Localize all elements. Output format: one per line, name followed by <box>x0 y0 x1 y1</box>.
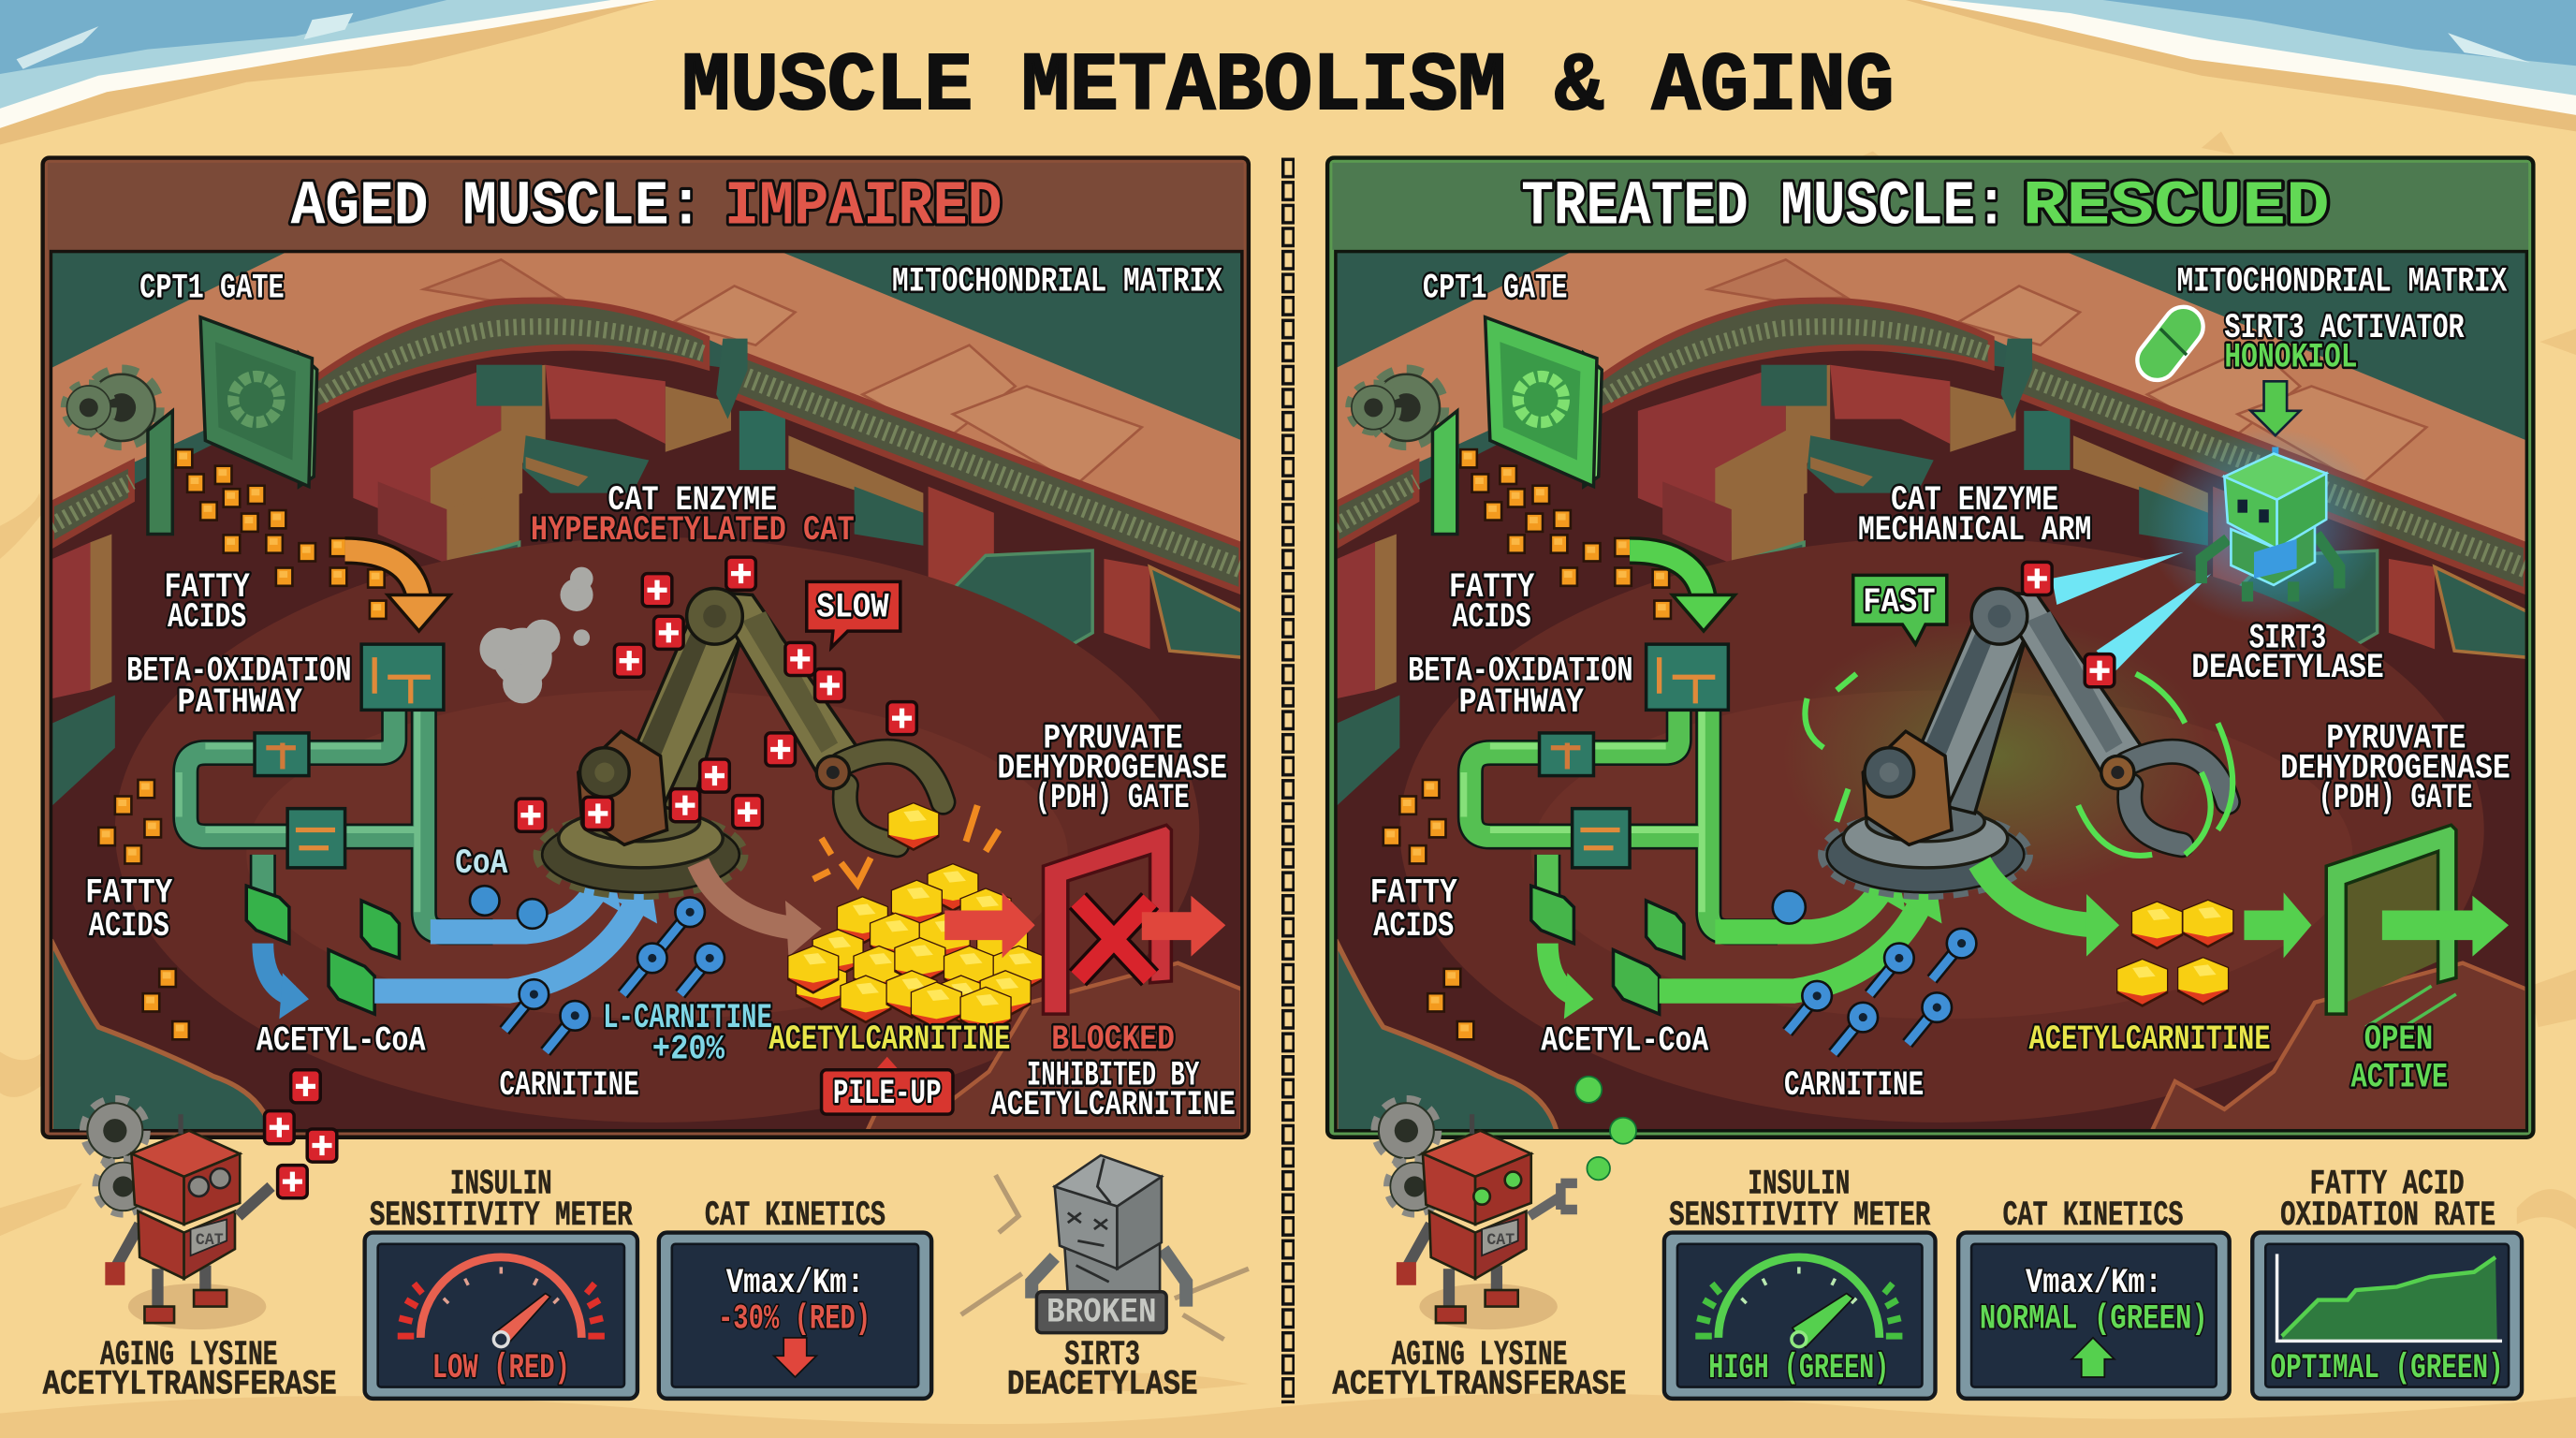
sand cracks <box>961 1175 1249 1340</box>
card value: Vmax/Km: <box>2026 1264 2162 1303</box>
panel header: RESCUED <box>2023 172 2330 243</box>
labels: aged panel: DEHYDROGENASE <box>997 749 1227 788</box>
smoke <box>479 567 593 703</box>
chart reading: OPTIMAL (GREEN) <box>2271 1349 2504 1388</box>
robot label, aged <box>43 1336 337 1405</box>
labels: aged panel: FATTY <box>85 874 173 914</box>
panel header: IMPAIRED <box>724 172 1003 243</box>
labels: treated panel: CAT ENZYME <box>1891 481 2058 521</box>
labels: aged panel: HYPERACETYLATED CAT <box>531 511 855 550</box>
SIRT3 deacetylase robot, active <box>2147 427 2384 624</box>
deacetylase beams <box>2023 552 2211 687</box>
CPT1 gate, open <box>1352 317 1602 535</box>
labels: aged panel: BETA-OXIDATION <box>126 653 352 692</box>
robot eyes <box>1473 1172 1521 1205</box>
carnitine keys <box>1788 929 1976 1053</box>
labels: treated panel: FATTY <box>1449 568 1535 608</box>
robot arms <box>1032 1249 1186 1307</box>
labels: treated panel: ACETYL-CoA <box>1541 1022 1709 1062</box>
blue flow arrows <box>263 863 657 1019</box>
down arrow <box>774 1338 816 1377</box>
labels: treated panel: DEHYDROGENASE <box>2280 749 2510 788</box>
robot label: DEACETYLASE <box>1007 1366 1197 1405</box>
labels: treated panel: OPEN <box>2364 1020 2433 1060</box>
panel: aged muscle <box>43 158 1249 1137</box>
robot face <box>1068 1159 1110 1282</box>
fatty acid oxidation rate card <box>2252 1165 2522 1399</box>
labels: aged panel: INHIBITED BY <box>1027 1057 1200 1096</box>
centre divider <box>1281 158 1295 1403</box>
panel header: TREATED MUSCLE: <box>1521 172 2008 243</box>
robot: aging lysine acetyltransferase, aged <box>87 1103 337 1329</box>
insulin sensitivity meter, high <box>1664 1165 1936 1399</box>
gauge dial <box>398 1257 605 1347</box>
labels: aged panel: MITOCHONDRIAL MATRIX <box>892 263 1222 302</box>
labels: treated panel: ACETYLCARNITINE <box>2029 1020 2271 1060</box>
water: top-left corner <box>0 0 657 144</box>
robot label: SIRT3 <box>1064 1336 1140 1375</box>
robot body <box>2224 453 2326 585</box>
meter heading: INSULIN <box>1748 1165 1850 1204</box>
meter screen <box>1664 1233 1936 1399</box>
labels: treated panel: DEACETYLASE <box>2191 649 2384 688</box>
labels: treated panel <box>1370 263 2510 1106</box>
card heading: CAT KINETICS <box>2002 1196 2184 1236</box>
labels: aged panel: CPT1 GATE <box>139 270 285 309</box>
arm motion swirls <box>1805 674 2232 856</box>
panel frame <box>43 158 1249 1137</box>
robot antenna <box>2274 447 2277 470</box>
title: MUSCLE METABOLISM & AGING <box>681 41 1895 134</box>
floor glow around arm <box>1782 616 2210 896</box>
scene border <box>1336 252 2526 1131</box>
labels: aged panel: ACETYLCARNITINE <box>768 1020 1010 1060</box>
labels: aged panel: (PDH) GATE <box>1035 779 1190 818</box>
labels: treated panel: (PDH) GATE <box>2318 779 2472 818</box>
meter heading: INSULIN <box>450 1165 552 1204</box>
area chart <box>2277 1254 2502 1341</box>
labels: aged panel: FATTY <box>165 568 250 608</box>
water: top-right corner <box>1906 0 2576 131</box>
card screen <box>659 1233 931 1399</box>
beta-oxidation pipes <box>179 644 493 1014</box>
card delta: NORMAL (GREEN) <box>1980 1299 2208 1339</box>
labels: aged panel: BLOCKED <box>1051 1020 1175 1060</box>
meter reading: HIGH (GREEN) <box>1708 1349 1889 1388</box>
robot label, aged: ACETYLTRANSFERASE <box>43 1366 337 1405</box>
SIRT3 activator pill <box>2130 299 2211 388</box>
labels: treated panel: ACTIVE <box>2351 1058 2448 1097</box>
scene: mitochondrial chamber <box>1336 252 2526 1134</box>
labels: treated panel: PYRUVATE <box>2326 720 2466 759</box>
card screen <box>2252 1233 2522 1399</box>
CAT kinetics card, treated <box>1958 1196 2230 1399</box>
panel header <box>1332 163 2528 250</box>
arrow: activator to SIRT3 <box>2250 381 2300 435</box>
panel header: AGED MUSCLE: <box>291 172 703 243</box>
acetylcarnitine tokens <box>2117 901 2232 1005</box>
card screen <box>1958 1233 2230 1399</box>
labels: aged panel: CoA <box>455 844 508 884</box>
up arrow <box>2071 1338 2115 1377</box>
labels: treated panel: ACIDS <box>1453 598 1531 638</box>
CPT1 gate <box>66 317 317 535</box>
labels: treated panel: BETA-OXIDATION <box>1408 653 1633 692</box>
fatty acid particles <box>98 449 386 1039</box>
broken tag: BROKEN <box>1046 1293 1157 1332</box>
pile-up tag: PILE-UP <box>833 1075 942 1114</box>
released acetyl dots <box>1575 1077 1636 1180</box>
labels: treated panel: MECHANICAL ARM <box>1858 511 2091 550</box>
robot limbs <box>2202 535 2339 601</box>
arrow: fatty acids entering <box>345 550 450 631</box>
labels: treated panel: CARNITINE <box>1784 1066 1924 1106</box>
robot label, treated: ACETYLTRANSFERASE <box>1332 1366 1627 1405</box>
scene border <box>51 252 1242 1131</box>
card heading: OXIDATION RATE <box>2280 1196 2496 1236</box>
blocked PDH gate <box>1043 825 1225 1014</box>
robot plate: CAT <box>196 1231 224 1250</box>
slow speech bubble <box>807 581 900 648</box>
robot glow <box>2147 427 2384 624</box>
labels: aged panel: PYRUVATE <box>1043 720 1183 759</box>
labels: treated panel: CPT1 GATE <box>1423 270 1567 309</box>
labels: aged panel: L-CARNITINE <box>603 999 772 1038</box>
robot body <box>1055 1155 1162 1295</box>
CAT kinetics card, aged <box>659 1196 931 1399</box>
carnitine keys <box>505 897 724 1051</box>
labels: aged panel: CARNITINE <box>500 1066 639 1106</box>
labels: aged panel: ACIDS <box>89 907 169 946</box>
stray acetyl mark <box>291 1070 320 1103</box>
arrow: fatty acids entering <box>1630 550 1734 631</box>
labels: aged panel: ACETYLCARNITINE <box>990 1086 1236 1125</box>
robot plate: CAT <box>1486 1231 1515 1250</box>
meter heading <box>370 1165 633 1236</box>
robot arm with acetyl marks <box>238 1111 337 1216</box>
panel frame <box>1327 158 2533 1137</box>
broken SIRT3 robot <box>961 1155 1249 1405</box>
robot: aging lysine acetyltransferase, treated <box>1379 1077 1636 1329</box>
acetyl marks on arm <box>516 557 916 831</box>
card value: Vmax/Km: <box>726 1264 864 1303</box>
pile-up tag <box>822 1057 953 1114</box>
CAT mechanical arm, hyperacetylated <box>539 588 943 894</box>
labels: treated panel: PATHWAY <box>1459 683 1585 723</box>
labels: treated panel: HONOKIOL <box>2224 338 2358 377</box>
acetylcarnitine pile <box>788 803 1043 1034</box>
robot label, aged: AGING LYSINE <box>100 1336 278 1375</box>
open PDH gate <box>2326 825 2509 1035</box>
CAT mechanical arm, restored <box>1823 588 2228 894</box>
labels: treated panel: FATTY <box>1370 874 1458 914</box>
fast speech bubble <box>1853 575 1947 644</box>
arrow: pile to gate <box>944 892 1035 958</box>
meter heading <box>1669 1165 1931 1236</box>
robot eyes: gears <box>189 1168 230 1196</box>
labels: aged panel: ACETYL-CoA <box>256 1022 426 1062</box>
arrow: tokens to gate <box>2244 892 2311 958</box>
gauge dial <box>1695 1257 1902 1347</box>
card heading: CAT KINETICS <box>705 1196 886 1236</box>
robot label <box>1007 1336 1197 1405</box>
labels: treated panel: SIRT3 <box>2249 620 2326 659</box>
labels: aged panel: ACIDS <box>168 598 246 638</box>
card delta: -30% (RED) <box>718 1299 871 1339</box>
fatty acid particles <box>1383 449 1671 1039</box>
panel: treated muscle <box>1327 158 2533 1137</box>
meter screen <box>365 1233 637 1399</box>
fast speech bubble: FAST <box>1863 583 1936 623</box>
output arrow <box>1980 863 2119 957</box>
beta-oxidation pipes <box>1464 644 1778 1014</box>
insulin sensitivity meter, low <box>365 1165 637 1399</box>
labels: treated panel: SIRT3 ACTIVATOR <box>2224 309 2465 348</box>
faded output arrow <box>698 863 822 957</box>
slow speech bubble: SLOW <box>816 588 889 627</box>
robot label, treated: AGING LYSINE <box>1392 1336 1567 1375</box>
green flow arrows <box>1547 863 1942 1019</box>
meter heading: SENSITIVITY METER <box>370 1196 633 1236</box>
scene: mitochondrial chamber <box>51 252 1242 1134</box>
card heading <box>2280 1165 2496 1236</box>
labels: treated panel: ACIDS <box>1373 907 1454 946</box>
meter heading: SENSITIVITY METER <box>1669 1196 1931 1236</box>
labels: aged panel: CAT ENZYME <box>607 481 777 521</box>
card heading: FATTY ACID <box>2310 1165 2465 1204</box>
labels: aged panel: +20% <box>652 1030 725 1069</box>
robot wrench arm <box>1530 1183 1577 1216</box>
robot face and screen <box>2237 500 2297 579</box>
meter reading: LOW (RED) <box>432 1349 570 1388</box>
labels: aged panel: PATHWAY <box>178 683 303 723</box>
robot label, treated <box>1332 1336 1627 1405</box>
labels: aged panel <box>85 263 1236 1125</box>
panel header <box>48 163 1244 250</box>
